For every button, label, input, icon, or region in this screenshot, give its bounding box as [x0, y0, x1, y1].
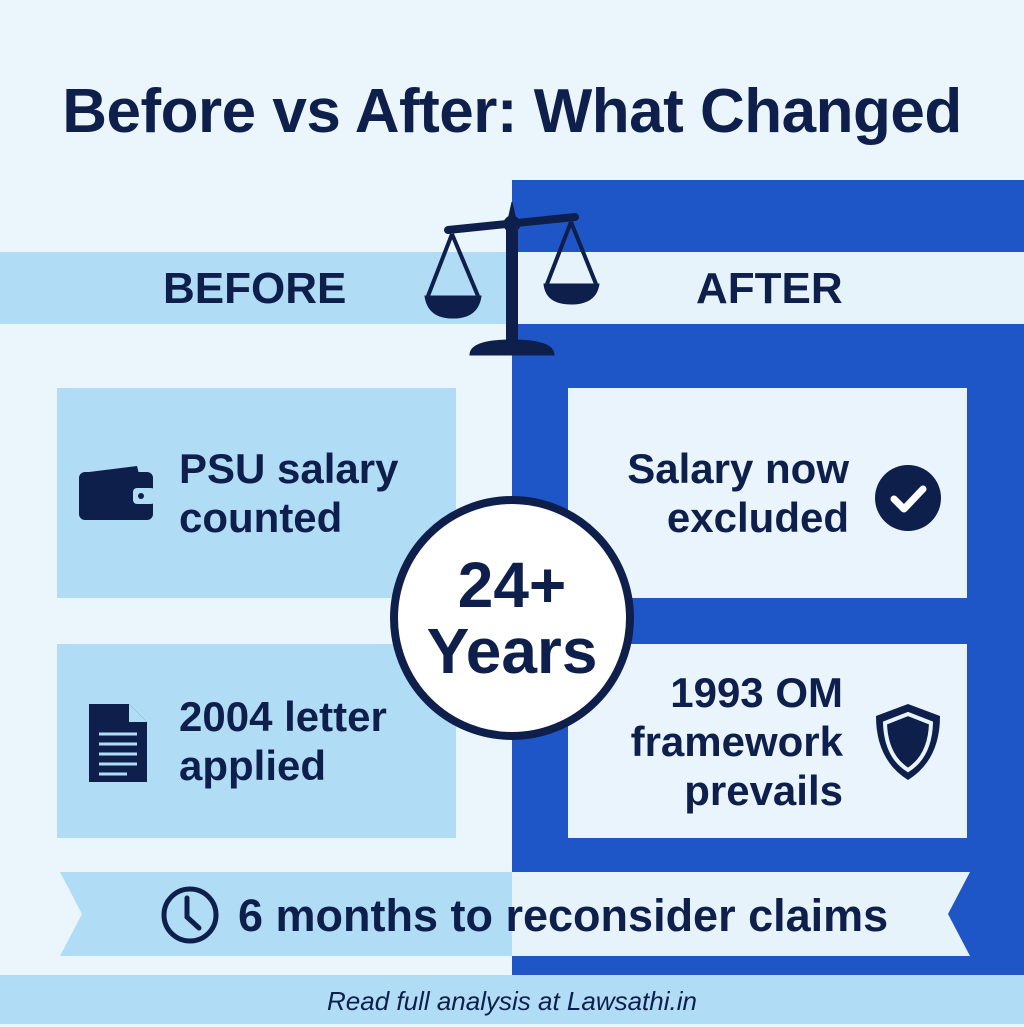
header band: after: AFTER: [696, 264, 843, 313]
card: PSU salary counted: PSU salary: [179, 445, 398, 492]
center badge: 24+ Years: [390, 496, 634, 740]
icon: clock: [164, 889, 216, 941]
icon: wallet: [79, 466, 153, 520]
header band: before: BEFORE: [163, 264, 346, 313]
icon: check: [875, 465, 941, 531]
icon: shield: [876, 704, 940, 780]
title: Before vs After: What Changed: [62, 77, 962, 146]
card: 2004 letter applied: 2004 letter: [179, 693, 387, 740]
footer: Read full analysis at Lawsathi.in: [327, 986, 697, 1016]
icon: scales of justice: [424, 202, 600, 356]
card: 1993 OM framework prevails: framework: [631, 718, 843, 764]
banner: 6 months: [60, 872, 970, 956]
card: PSU salary counted: counted: [179, 494, 342, 541]
center badge: 24+ Years: Years: [427, 615, 597, 687]
header band: before: [0, 252, 512, 324]
icon: document: [89, 704, 147, 782]
card: 2004 letter applied: applied: [179, 742, 326, 789]
card: PSU salary counted: [57, 388, 456, 598]
footer: [0, 975, 1024, 1024]
card: salary now excluded: Salary now: [627, 445, 849, 492]
header band: after: [512, 252, 1024, 324]
card: 2004 letter applied: [57, 644, 456, 838]
right blue panel: [512, 180, 1024, 975]
card: 1993 OM framework prevails: prevails: [684, 766, 843, 814]
banner: 6 months: 6 months to reconsider claims: [238, 890, 888, 941]
card: salary now excluded: excluded: [667, 494, 849, 541]
card: 1993 OM framework prevails: 1993 OM: [670, 668, 843, 716]
center badge: 24+ Years: 24+: [458, 549, 566, 621]
card: 1993 OM framework prevails: [568, 644, 967, 838]
card: salary now excluded: [568, 388, 967, 598]
